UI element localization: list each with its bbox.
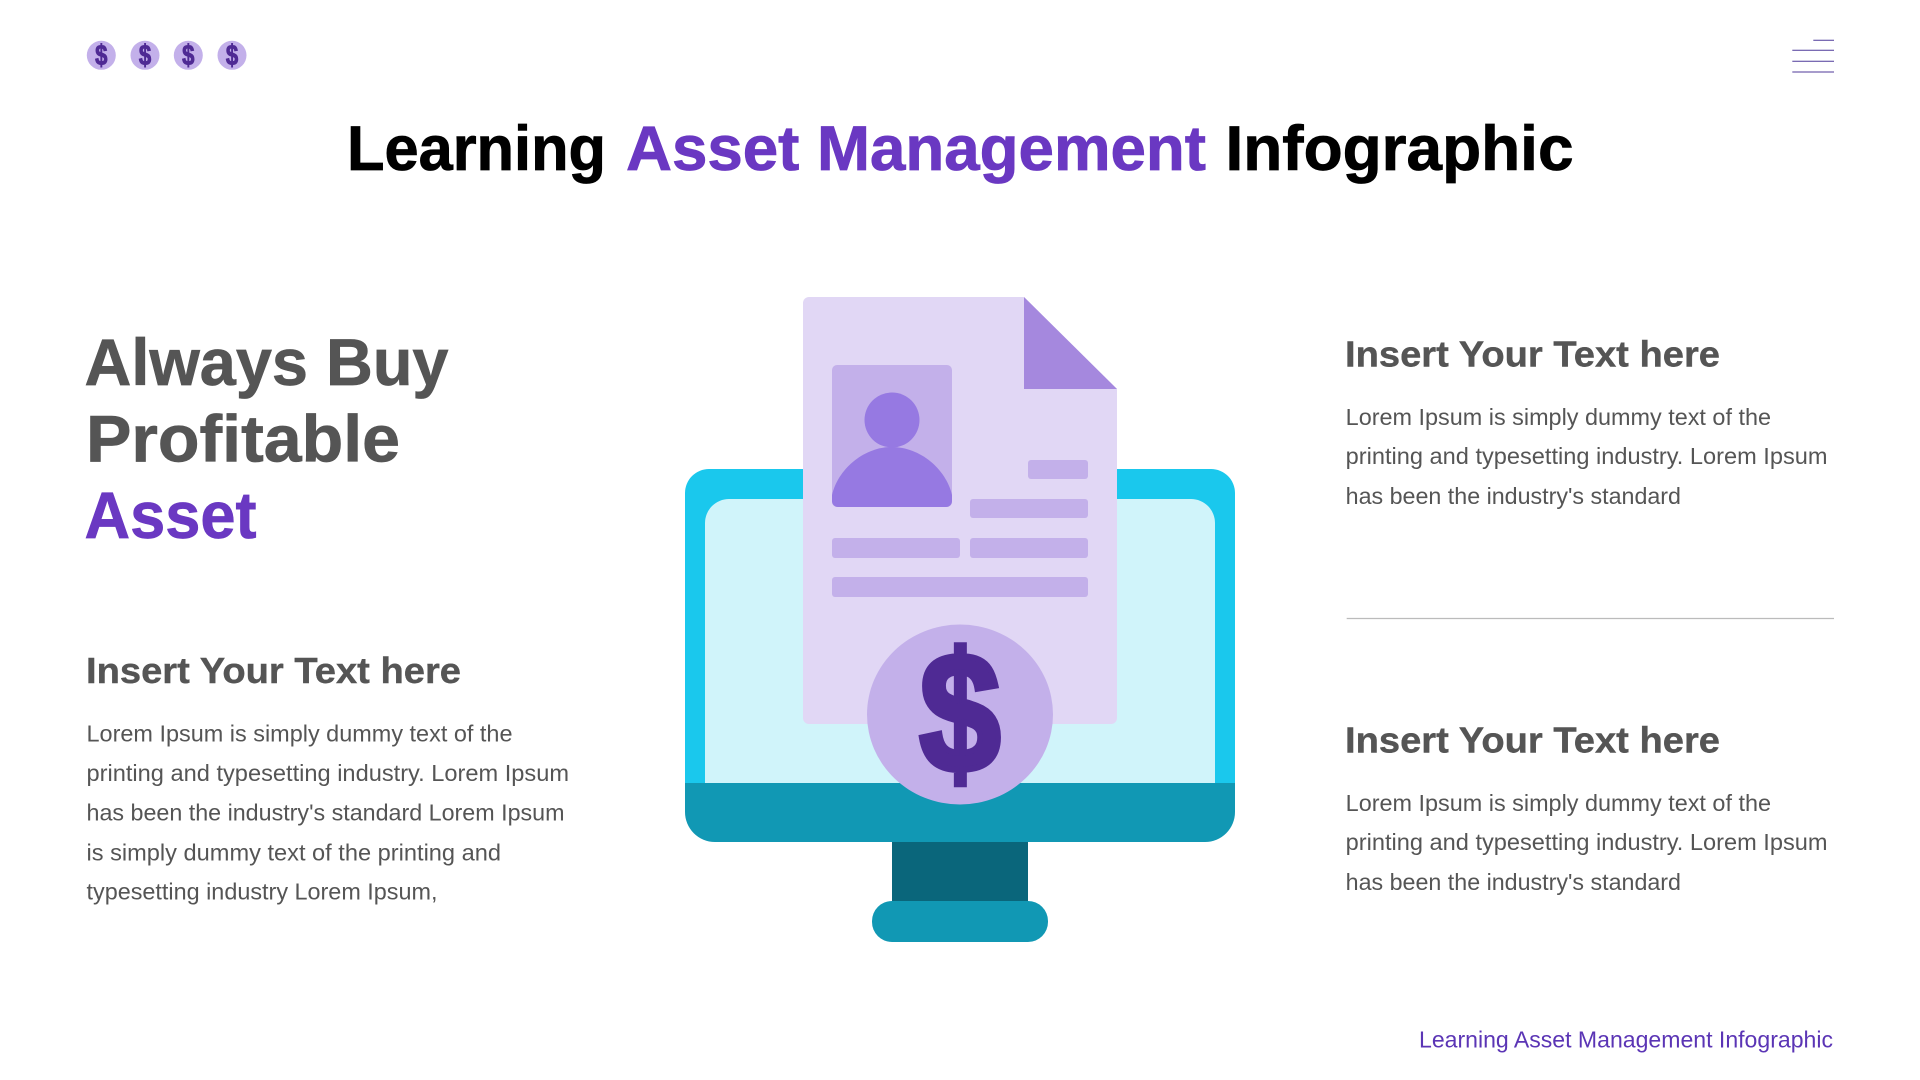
icon: dollar coin 1: $: [95, 40, 107, 72]
paragraph: right top: [1346, 404, 1828, 509]
paragraph: left: typesetting industry Lorem Ipsum,: [86, 878, 438, 904]
monitor frame: [685, 469, 1235, 783]
paragraph: left: is simply dummy text of the printing and: [86, 839, 501, 865]
document page: [803, 297, 1117, 724]
paragraph: left: [86, 721, 569, 904]
subheading: right bottom: Insert Your Text here: [1345, 719, 1720, 760]
monitor bottom bezel: [685, 783, 1235, 842]
icon: dollar coin 3: [174, 40, 203, 72]
paragraph: right top: has been the industry's standard: [1346, 483, 1681, 509]
paragraph: right top: printing and typesetting industry. Lorem Ipsum: [1346, 443, 1828, 469]
paragraph: right bottom: has been the industry's standard: [1346, 869, 1681, 895]
monitor foot: [872, 901, 1048, 942]
icon row: dollar coins: [87, 40, 246, 72]
paragraph: right bottom: [1346, 790, 1828, 895]
paragraph: right bottom: printing and typesetting industry. Lorem Ipsum: [1346, 829, 1828, 855]
paragraph: right bottom: Lorem Ipsum is simply dummy text of the: [1346, 790, 1771, 816]
heading: Always Buy Profitable Asset: Always Buy: [84, 325, 449, 399]
paragraph: right top: Lorem Ipsum is simply dummy text of the: [1346, 404, 1771, 430]
monitor neck: [892, 842, 1028, 902]
icon: dollar coin 3: $: [182, 40, 194, 72]
text block: right bottom: [1345, 719, 1828, 895]
monitor screen: [705, 499, 1215, 783]
dollar coin: [867, 619, 1053, 808]
paragraph: left: Lorem Ipsum is simply dummy text of the: [86, 721, 512, 747]
icon: dollar coin 4: $: [226, 40, 238, 72]
text block: left: [86, 650, 569, 904]
paragraph: left: printing and typesetting industry. Lorem Ipsum: [86, 760, 569, 786]
heading: Always Buy Profitable Asset: [84, 325, 449, 552]
subheading: left: Insert Your Text here: [86, 650, 461, 691]
profile photo: [832, 365, 952, 507]
icon: dollar coin 2: $: [139, 40, 151, 72]
icon: dollar coin 2: [130, 40, 160, 72]
subheading: right top: Insert Your Text here: [1345, 334, 1720, 375]
dollar coin: $: [920, 619, 1000, 808]
illustration: monitor with document and coin: [685, 297, 1235, 942]
title: Learning: [347, 114, 606, 184]
paragraph: left: has been the industry's standard Lorem Ipsum: [86, 800, 564, 826]
icon: menu lines: [1792, 40, 1834, 72]
footer label: Learning Asset Management Infographic: [1419, 1026, 1833, 1052]
icon: dollar coin 1: [87, 40, 116, 72]
document fold: [1024, 297, 1117, 389]
title: Asset Management: [626, 114, 1206, 184]
title: Infographic: [1226, 114, 1574, 184]
document text bars: [832, 460, 1088, 597]
icon: dollar coin 4: [218, 40, 246, 72]
title: [347, 114, 1574, 184]
heading: Always Buy Profitable Asset: Asset: [84, 478, 257, 552]
heading: Always Buy Profitable Asset: Profitable: [86, 402, 400, 476]
text block: right top: [1345, 334, 1828, 509]
